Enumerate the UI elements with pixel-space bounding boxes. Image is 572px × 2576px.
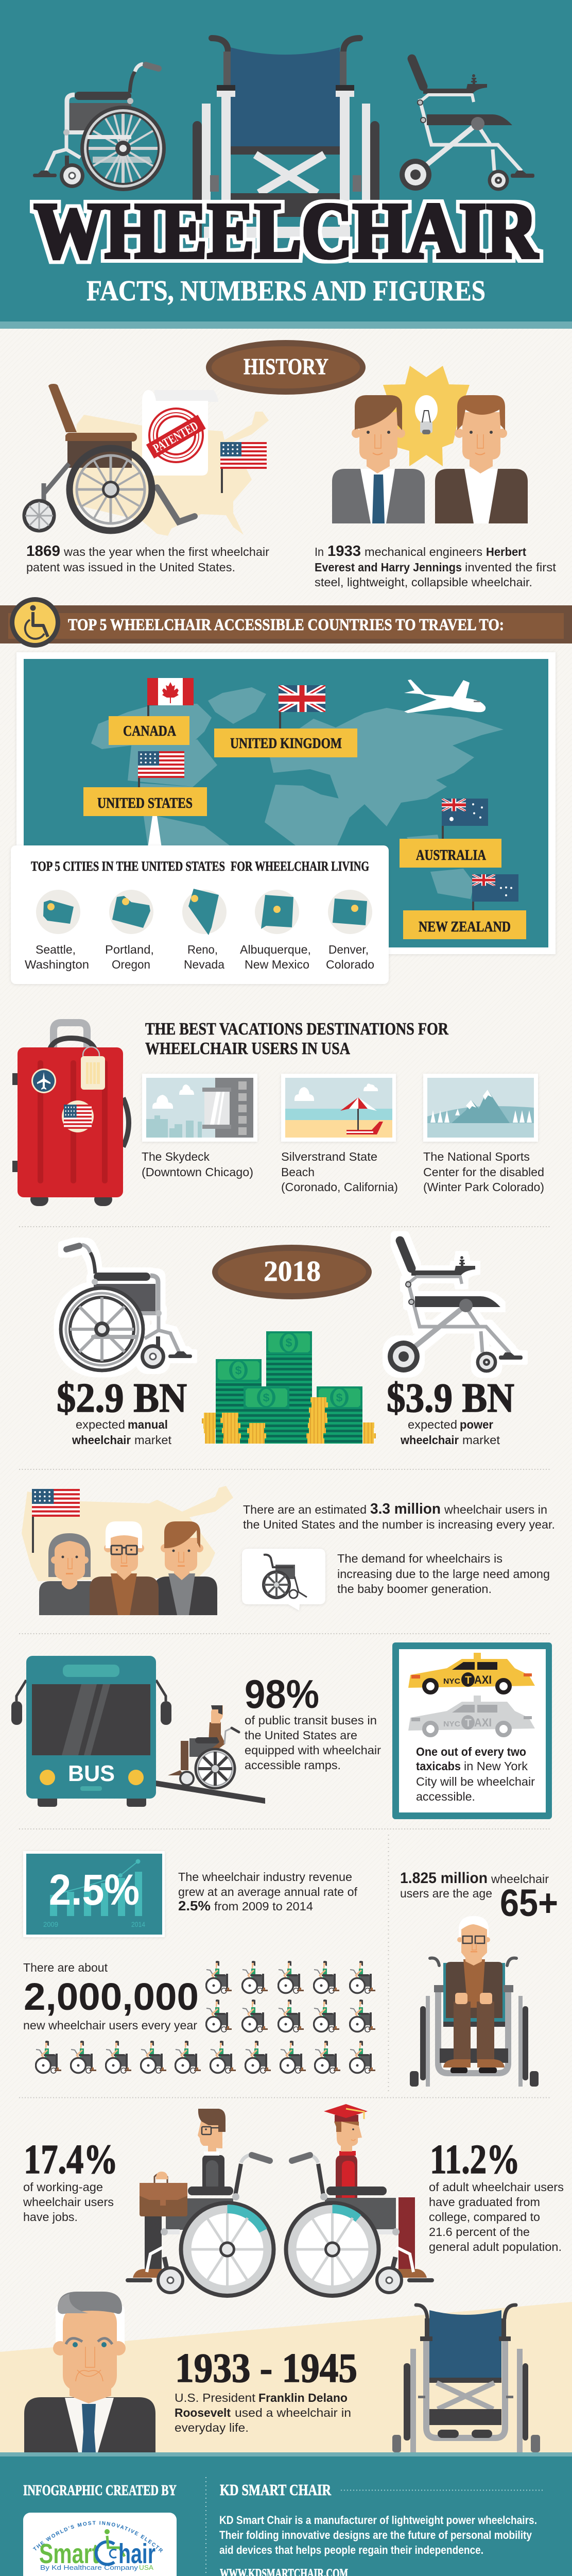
text: silverstrand: (Coronado, California) (281, 1180, 398, 1194)
text: age 65+: 1.825 million (400, 1870, 488, 1887)
stat: manual market: $2.9 BN (57, 1376, 187, 1421)
stat: power market: $3.9 BN (387, 1376, 514, 1421)
heading: infographic created by: INFOGRAPHIC CREATED BY (23, 2483, 177, 2499)
chart: revenue growth (23, 1851, 165, 1937)
heading: FOR WHEELCHAIR LIVING (231, 859, 369, 874)
text: college: of adult wheelchair users (429, 2180, 564, 2194)
subtitle: FACTS, NUMBERS AND FIGURES (86, 275, 486, 307)
logo: smart chair: hair (118, 2538, 155, 2569)
text: skydeck (142, 1150, 253, 1179)
section: us wheelchair users (22, 1486, 555, 1615)
illustration: inventors (332, 366, 528, 523)
woman (39, 1533, 91, 1615)
badge: history: HISTORY (244, 354, 328, 379)
stat: manual market: market (134, 1433, 172, 1447)
icon: gray taxi: NYC (443, 1720, 460, 1728)
map: united states (22, 1486, 233, 1581)
text: transit buses (245, 1714, 381, 1772)
label: new zealand: NEW ZEALAND (419, 919, 511, 935)
section: fdr (0, 2292, 572, 2452)
city: portland: Portland, (105, 943, 154, 956)
man with brown jacket (90, 1521, 159, 1615)
city: reno (182, 889, 227, 971)
section: industry growth (23, 1851, 558, 2087)
heading: THE BEST VACATIONS DESTINATIONS FOR (145, 1020, 448, 1039)
briefcase (140, 2172, 187, 2216)
text: 3.3 million: wheelchair users in (444, 1503, 547, 1516)
illustration: three seniors (39, 1521, 217, 1615)
flag: united states (138, 751, 184, 788)
icon: yellow taxi (408, 1653, 535, 1692)
text: roosevelt: everyday life. (175, 2421, 249, 2434)
text: 1869 patent: was the year when the first wheelchair (63, 545, 269, 558)
icon: power wheelchair market (388, 1241, 523, 1372)
text: national sports center: The National Sports (423, 1150, 530, 1163)
text: 3.3 million: 3.3 million (370, 1501, 441, 1517)
section: vacation destinations (12, 1020, 544, 1206)
illustration: money stacks (202, 1331, 376, 1444)
map: united states (70, 412, 269, 536)
text: 1933 inventors: invented the first (465, 561, 557, 574)
stat: power market: wheelchair (400, 1433, 459, 1447)
flag: canada (147, 678, 194, 717)
text: jobs: of working-age (23, 2180, 103, 2194)
flag: usa (32, 1489, 80, 1553)
text: 2,000,000 new users: 2,000,000 (24, 1975, 199, 2018)
inventor: herbert everest (332, 395, 425, 523)
logo: smart chair: THE WORLD'S MOST INNOVATIVE ELECTRIC CHAIR (33, 2521, 163, 2553)
stat: 11.2%: 11.2% (430, 2137, 520, 2182)
section: jobs and education (23, 2104, 564, 2296)
world map (91, 687, 504, 899)
wheel with 11.2% arc (286, 2203, 379, 2296)
text: college: general adult population. (429, 2240, 562, 2253)
panel: world map countries (16, 652, 556, 954)
text: company description (219, 2514, 537, 2556)
text: skydeck: The Skydeck (142, 1150, 210, 1163)
stat: 1933 - 1945: 1933 - 1945 (175, 2346, 357, 2391)
heading: WHEELCHAIR USERS IN USA (145, 1039, 350, 1058)
callout: speech bubble with wheelchair (242, 1549, 325, 1611)
city: denver: Colorado (326, 958, 374, 971)
icon: fdr wheelchair (392, 2305, 540, 2452)
pictogram: new wheelchair users (36, 1961, 375, 2073)
label: australia (400, 839, 501, 868)
text: taxicabs: in New York (464, 1759, 528, 1773)
icon: bus (11, 1656, 171, 1807)
text: transit buses: equipped with wheelchair (245, 1743, 381, 1757)
text: 1933 inventors: In (315, 545, 324, 558)
destination: national sports center (423, 1074, 538, 1142)
heading: TOP 5 CITIES IN THE UNITED STATES (31, 859, 225, 874)
text: revenue growth (178, 1870, 358, 1913)
city: portland (105, 890, 154, 971)
flag: australia (442, 799, 488, 839)
icon: working man in wheelchair (126, 2109, 274, 2296)
text: baby boomer demand (337, 1552, 550, 1596)
inventor: harry jennings (435, 395, 528, 523)
text: 1933 inventors: steel, lightweight, collapsible wheelchair. (315, 575, 532, 589)
chart: revenue growth: 2014 (131, 1920, 145, 1928)
text: roosevelt (175, 2391, 351, 2434)
text: national sports center (423, 1150, 544, 1194)
destination: skydeck (142, 1074, 257, 1142)
logo: smart chair: Smart (39, 2538, 99, 2569)
icon: accessibility symbol (10, 597, 60, 648)
icon: gray taxi: T (465, 1717, 472, 1729)
text: taxicabs (416, 1745, 535, 1803)
stamp (146, 409, 206, 462)
destination: silverstrand beach (281, 1074, 396, 1142)
chart: revenue growth: 2.5% (49, 1866, 140, 1914)
text: transit buses: accessible ramps. (245, 1758, 341, 1772)
text: 1933 inventors: mechanical engineers (365, 545, 482, 558)
section: history (24, 340, 557, 589)
panel: nyc taxi (392, 1642, 552, 1819)
flag: usa (220, 442, 267, 493)
text: jobs (23, 2180, 114, 2224)
label: united kingdom: UNITED KINGDOM (230, 735, 342, 752)
text: baby boomer demand: The demand for wheelchairs is (337, 1552, 502, 1565)
stat: 17.4%: 17.4% (24, 2137, 118, 2182)
city: portland: Oregon (112, 958, 150, 971)
icon: power wheelchair (400, 59, 534, 191)
stamp: PATENTED (151, 419, 201, 456)
flag: united kingdom (279, 685, 325, 729)
city: seattle: Seattle, (36, 943, 76, 956)
text: national sports center: (Winter Park Colorado) (423, 1180, 544, 1194)
icon: graduate in wheelchair (286, 2104, 434, 2296)
text: transit buses: of public transit buses in (245, 1714, 377, 1727)
stat: manual market: wheelchair (72, 1433, 131, 1447)
text: age 65+: 65+ (500, 1882, 558, 1924)
stat: power market (387, 1376, 514, 1447)
text: roosevelt: used a wheelchair in (235, 2406, 351, 2419)
city: denver (326, 890, 374, 971)
icon: gray taxi (408, 1696, 535, 1735)
illustration: senior in wheelchair (410, 1916, 539, 2087)
text: college: 21.6 percent of the (429, 2225, 530, 2239)
text: 3.3 million: the United States and the number is increasing every year. (243, 1518, 555, 1531)
text: 3.3 million (243, 1501, 555, 1531)
text: age 65+: users are the age (400, 1887, 492, 1900)
text: 2,000,000 new users (23, 1961, 199, 2032)
flag: new zealand (472, 874, 518, 910)
panel: top 5 cities (11, 816, 389, 984)
badge: 2018: 2018 (264, 1256, 321, 1287)
stat: 98%: 98% (245, 1671, 319, 1717)
heading: TOP 5 WHEELCHAIR ACCESSIBLE COUNTRIES TO TRAVEL TO: (68, 615, 504, 634)
stat: power market: expected (408, 1418, 457, 1431)
city: seattle: Washington (25, 958, 89, 971)
text: revenue growth: from 2009 to 2014 (214, 1900, 313, 1913)
text: silverstrand (281, 1150, 398, 1194)
text: national sports center: Center for the disabled (423, 1165, 544, 1179)
text: taxicabs: taxicabs (416, 1759, 461, 1773)
label: united states: UNITED STATES (97, 795, 193, 811)
label: united kingdom (214, 728, 357, 757)
wheel with 17.4% arc (181, 2203, 274, 2296)
text: transit buses: the United States are (245, 1728, 357, 1742)
text: jobs: have jobs. (23, 2210, 78, 2224)
text: 1869 patent: patent was issued in the United States. (26, 561, 235, 574)
city: reno: Nevada (184, 958, 224, 971)
badge: 2018 (212, 1245, 372, 1299)
icon: yellow taxi: T (465, 1674, 472, 1686)
section: public transit (11, 1642, 552, 1819)
text: 1933 inventors (315, 543, 557, 589)
stat: power market: market (462, 1433, 500, 1447)
text: silverstrand: Silverstrand State (281, 1150, 377, 1163)
icon: red suitcase (12, 1023, 129, 1206)
icon: gray taxi: AXI (474, 1716, 492, 1729)
heading (145, 1020, 448, 1058)
city: seattle (25, 890, 89, 971)
text: company description: Their folding innovative designs are the future of personal mobility (219, 2529, 532, 2541)
badge: history (206, 340, 366, 395)
text: baby boomer demand: increasing due to the large need among (337, 1567, 550, 1581)
city: albuquerque: New Mexico (245, 958, 309, 971)
text: college: have graduated from (429, 2195, 540, 2209)
label: united states (83, 787, 207, 816)
man in grey vest (154, 1521, 217, 1615)
text: age 65+ (400, 1870, 558, 1924)
label: australia: AUSTRALIA (416, 847, 486, 863)
label: canada (109, 716, 189, 745)
text: roosevelt: Roosevelt (175, 2406, 231, 2419)
icon: bus: BUS (68, 1761, 115, 1786)
text: 2,000,000 new users: There are about (23, 1961, 108, 1974)
icon: yellow taxi: NYC (443, 1677, 460, 1686)
label: new zealand (403, 910, 526, 939)
text: revenue growth: 2.5% (178, 1898, 211, 1913)
chart: revenue growth: 2009 (43, 1920, 58, 1928)
icon: airplane (404, 680, 486, 713)
text: skydeck: (Downtown Chicago) (142, 1165, 253, 1179)
text: taxicabs: accessible. (416, 1790, 475, 1803)
city: albuquerque: Albuquerque, (240, 943, 311, 956)
ramp (156, 1781, 265, 1804)
text: company description: aid devices that helps people regain their independence. (219, 2544, 483, 2556)
logo: smart chair (23, 2513, 177, 2576)
heading: kd smart chair: KD SMART CHAIR (220, 2481, 331, 2499)
stat: manual market: expected (76, 1418, 125, 1431)
text: roosevelt: Franklin Delano (258, 2391, 348, 2404)
icon: patent document (142, 390, 218, 476)
text: college: college, compared to (429, 2210, 540, 2224)
text: 1933 inventors: Herbert (486, 545, 526, 558)
text: 1869 patent (26, 543, 269, 574)
city: denver: Denver, (328, 943, 369, 956)
text: 1933 inventors: 1933 (327, 543, 361, 560)
header panel (0, 0, 572, 329)
stat: manual market: manual (128, 1418, 168, 1431)
text: 2,000,000 new users: new wheelchair users every year (23, 2019, 197, 2032)
text: taxicabs: City will be wheelchair (416, 1775, 535, 1788)
logo: smart chair: By Kd Healthcare Company (40, 2564, 138, 2571)
stat: manual market (57, 1376, 187, 1447)
section: 2018 market (57, 1241, 523, 1447)
icon: manual wheelchair (33, 64, 166, 191)
icon: man in wheelchair on ramp (168, 1705, 239, 1788)
icon: antique wheelchair (24, 384, 195, 531)
icon: yellow taxi: AXI (474, 1673, 492, 1686)
city: reno: Reno, (187, 943, 218, 956)
logo: smart chair: USA (139, 2564, 153, 2571)
text: silverstrand: Beach (281, 1165, 315, 1179)
text: roosevelt: U.S. President (175, 2391, 256, 2404)
icon: front view wheelchair (193, 38, 379, 260)
banner: top 5 countries (0, 597, 572, 648)
portrait: franklin roosevelt (24, 2292, 155, 2452)
text: 1933 inventors: Everest and Harry Jennings (315, 561, 462, 574)
city: albuquerque (240, 890, 311, 971)
text: 3.3 million: There are an estimated (243, 1503, 367, 1516)
lightbulb burst (383, 366, 470, 466)
text: 1869 patent: 1869 (26, 543, 60, 560)
text: age 65+: wheelchair (491, 1872, 549, 1886)
text: taxicabs: One out of every two (416, 1745, 526, 1758)
stat: power market: power (460, 1418, 493, 1431)
label: canada: CANADA (123, 723, 176, 739)
text: jobs: wheelchair users (23, 2195, 114, 2209)
text: college (429, 2180, 564, 2253)
text: revenue growth: The wheelchair industry revenue (178, 1870, 352, 1884)
text: revenue growth: grew at an average annual rate of (178, 1885, 358, 1899)
icon: manual wheelchair market (61, 1245, 192, 1370)
text: baby boomer demand: the baby boomer generation. (337, 1582, 492, 1596)
